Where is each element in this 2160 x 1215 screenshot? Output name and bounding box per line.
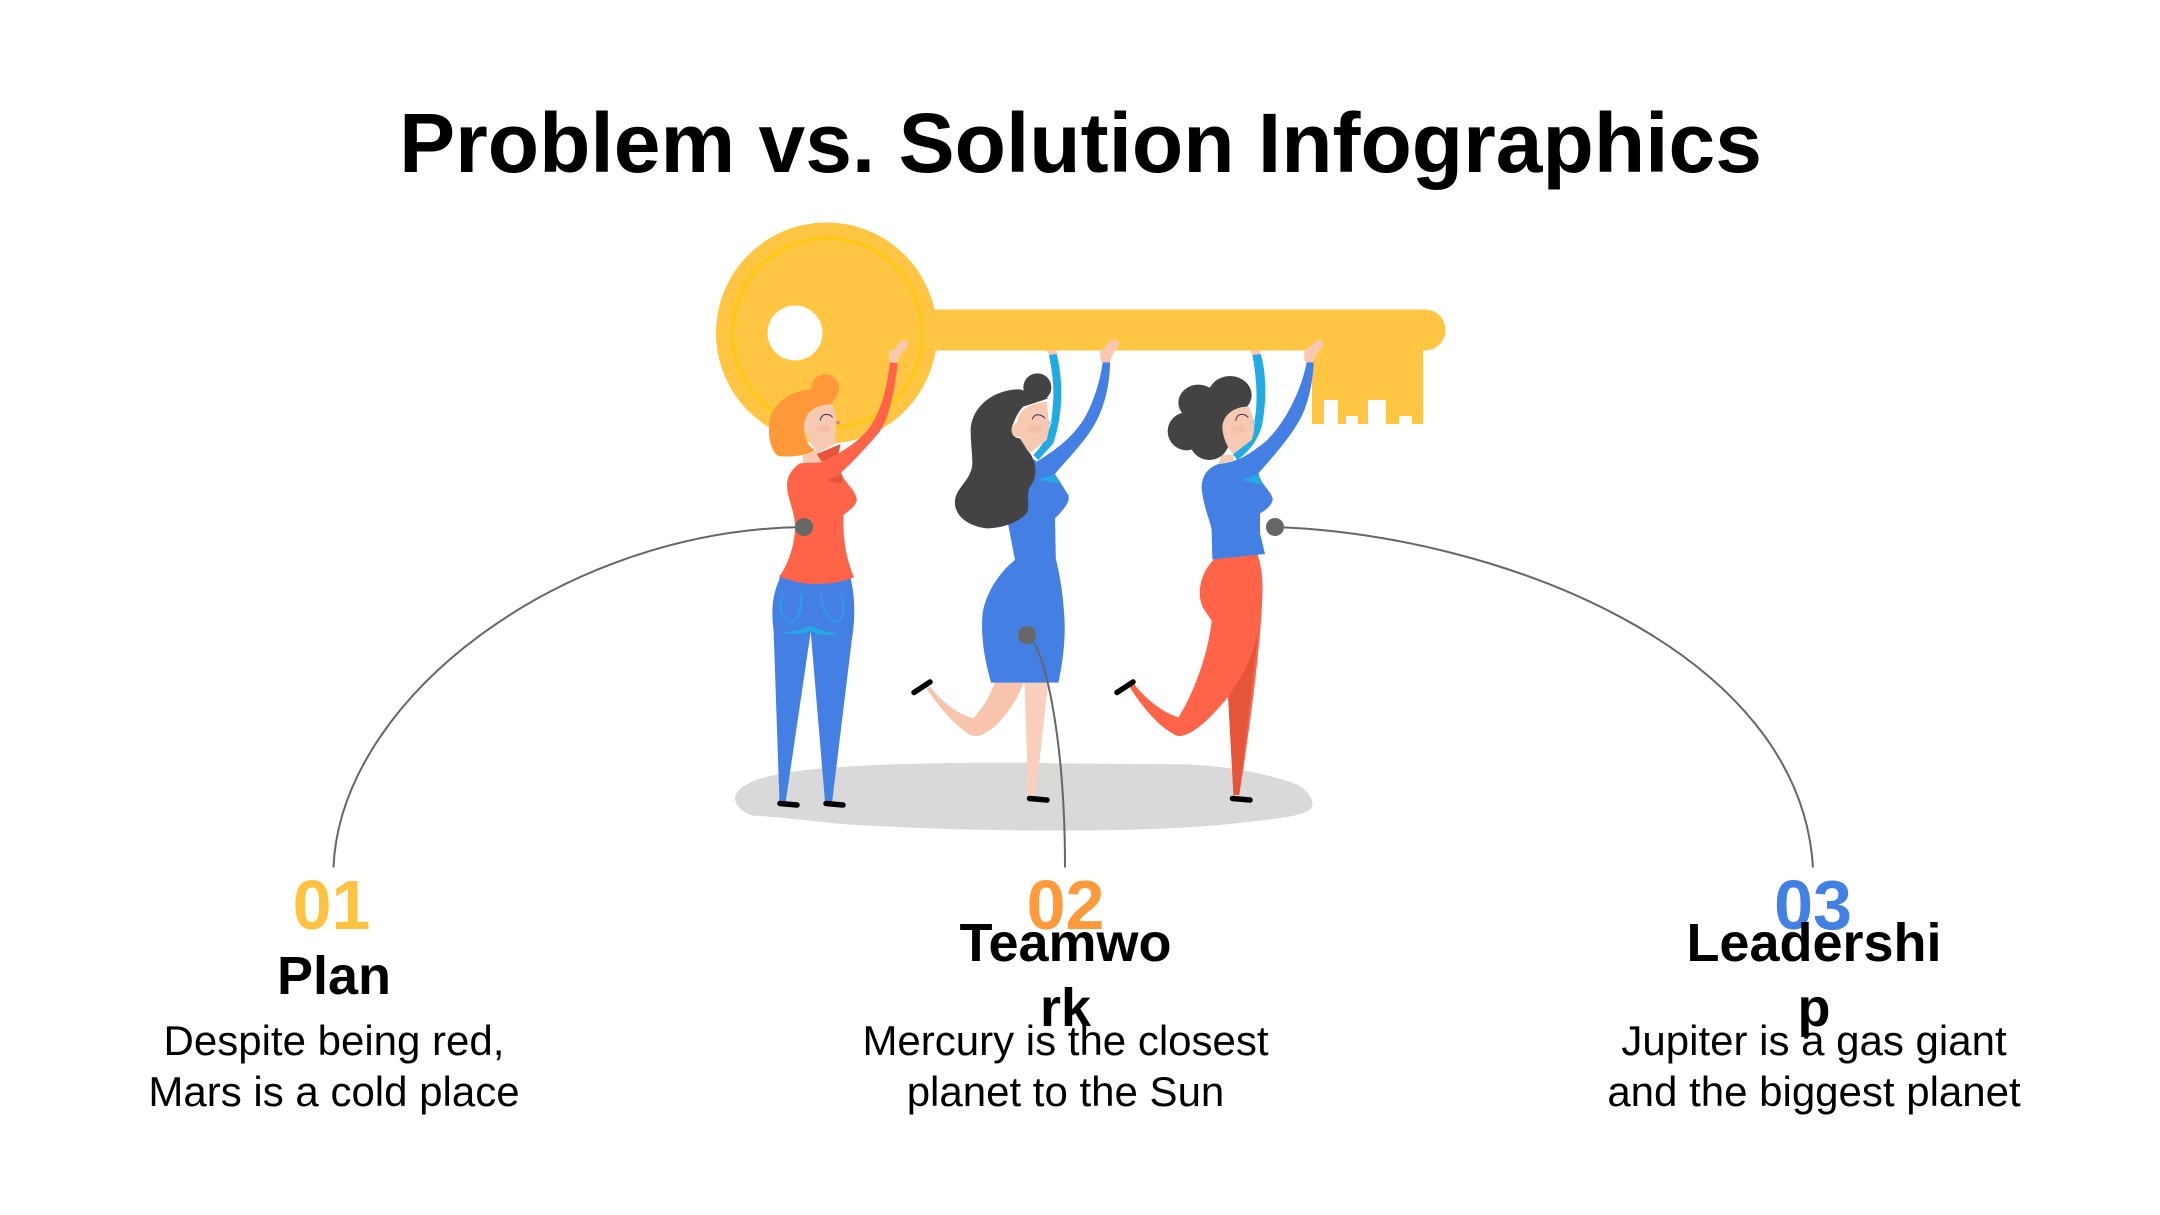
description: leadership: Jupiter is a gas giant	[1621, 1016, 2007, 1064]
jeans	[772, 575, 854, 802]
heading: teamwork: Teamwork	[959, 913, 1172, 1038]
connector: leadership	[1266, 518, 1813, 868]
upper body and head	[1168, 340, 1323, 559]
title: Problem vs. Solution Infographics	[399, 96, 1762, 190]
figure: woman with curly dark hair	[1117, 340, 1323, 800]
heading: leadership: Leadership	[1686, 913, 1942, 1038]
description: leadership	[1607, 1016, 2021, 1114]
number 03: 03	[1774, 866, 1852, 944]
description: plan	[148, 1016, 520, 1114]
figure: woman with long dark hair	[914, 340, 1119, 800]
shoes	[914, 682, 1047, 800]
description: plan: Despite being red,	[164, 1016, 504, 1064]
number 01: 01	[293, 866, 370, 944]
icon: golden key	[716, 222, 1445, 444]
figure: woman with orange hair	[769, 340, 908, 805]
description: teamwork	[862, 1016, 1269, 1114]
description: leadership: and the biggest planet	[1607, 1068, 2021, 1114]
connector: teamwork	[1018, 626, 1065, 868]
legs and skirt	[926, 513, 1065, 795]
shoes	[1117, 682, 1250, 800]
upper body and head	[955, 340, 1119, 560]
connector: plan	[334, 518, 813, 868]
description: plan: Mars is a cold place	[148, 1068, 520, 1114]
trousers	[1130, 550, 1263, 795]
number 02: 02	[1027, 866, 1104, 944]
heading: plan: Plan	[277, 946, 391, 1006]
shoes	[780, 804, 843, 805]
description: teamwork: planet to the Sun	[907, 1068, 1224, 1114]
description: teamwork: Mercury is the closest	[862, 1016, 1269, 1064]
ground shadow	[735, 763, 1312, 831]
upper body and head	[769, 340, 908, 584]
